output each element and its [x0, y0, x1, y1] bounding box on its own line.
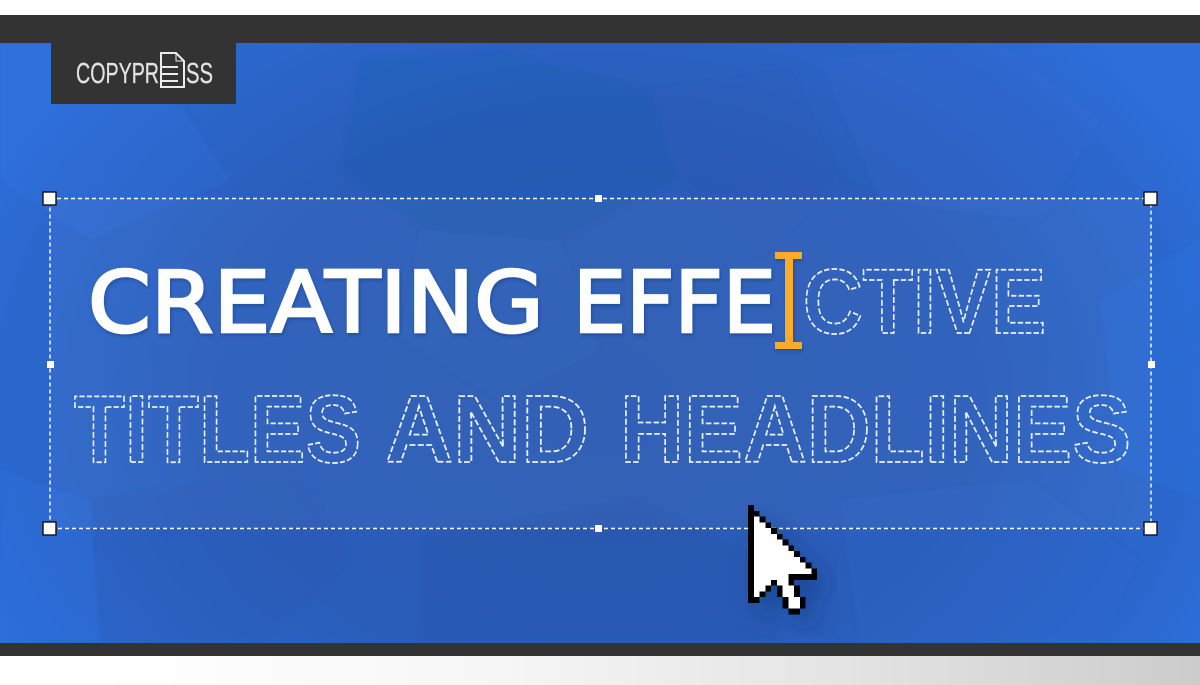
pixel mouse pointer: [748, 505, 817, 614]
headline outlined second line: AND: [385, 376, 589, 483]
headline outlined second line: HEADLINES: [620, 376, 1131, 483]
logo tab: [51, 43, 236, 104]
selection box dashed frame: [50, 198, 1151, 528]
logo wordmark start: COPYPR: [76, 58, 159, 90]
top dark bar: [0, 15, 1200, 43]
headline outlined second line: TITLES: [74, 376, 361, 483]
headline outlined remainder: CTIVE: [803, 251, 1046, 353]
text cursor I-beam: [775, 252, 802, 349]
headline typed text: CREATING: [88, 254, 544, 353]
headline typed text: [88, 254, 776, 353]
footer shelf gradient: [0, 656, 1200, 685]
selection box tint: [50, 198, 1150, 528]
selection handles: [43, 192, 1157, 535]
headline outlined second line: [74, 376, 1131, 483]
logo document icon: [161, 53, 184, 87]
headline typed text: EFFE: [573, 254, 776, 353]
bottom dark bar: [0, 643, 1200, 656]
logo wordmark end: SS: [186, 58, 213, 90]
